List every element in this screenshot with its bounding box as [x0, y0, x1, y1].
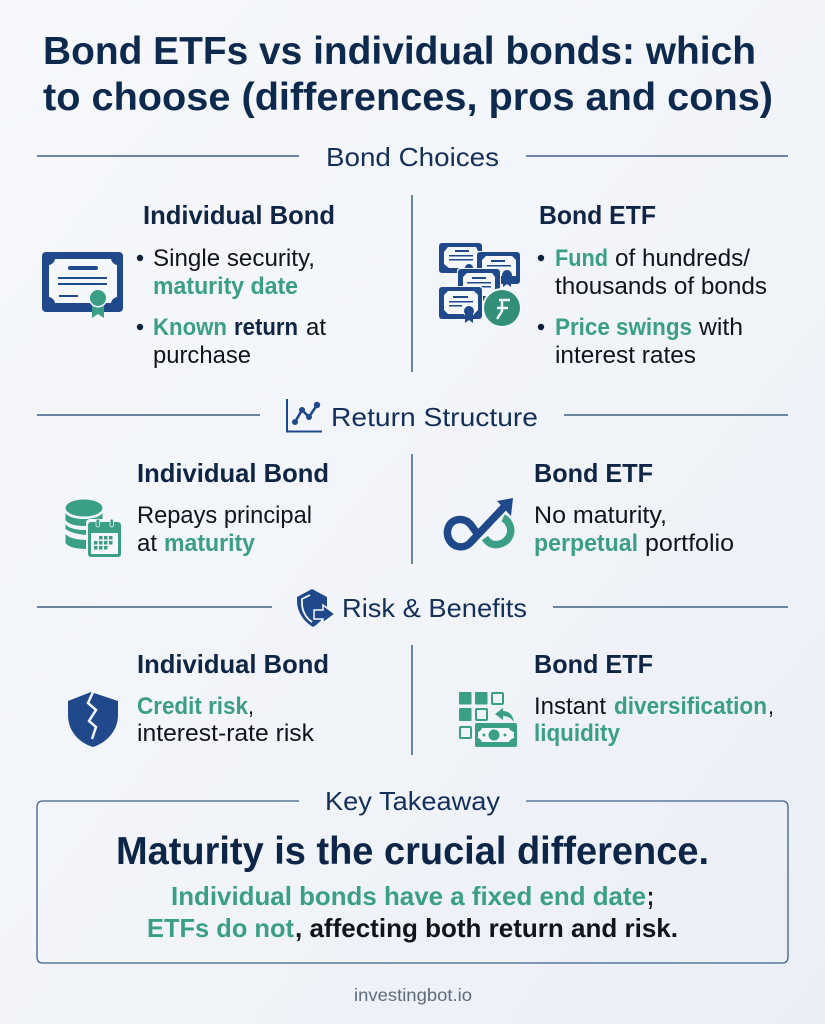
text: repays principal: at [137, 530, 157, 557]
bullet list: maturity date [153, 273, 298, 300]
bullet list: interest rates [555, 342, 696, 369]
heading: Individual Bond: Individual Bond [137, 649, 329, 679]
text: repays principal [137, 502, 312, 557]
divider [411, 454, 413, 564]
text: explanation [147, 881, 678, 943]
bullet list: Fund [555, 245, 608, 272]
bullet list: return [234, 314, 298, 341]
bullet list [137, 245, 326, 369]
bullet list: thousands of bonds [555, 273, 767, 300]
text: no maturity: No maturity, [534, 502, 667, 529]
icon: infinity arrow [447, 498, 513, 547]
text: explanation: ; [647, 881, 654, 911]
section heading: Bond Choices: Bond Choices [326, 142, 499, 172]
panel: Bond ETF return [447, 458, 734, 557]
text: repays principal: maturity [164, 530, 256, 557]
text: no maturity: portfolio [645, 530, 734, 557]
text: instant diversification: liquidity [534, 720, 621, 747]
icon: coin stack with calendar [66, 500, 122, 558]
footer: source: investingbot.io [354, 985, 472, 1005]
text: instant diversification: Instant [534, 693, 606, 720]
panel: Bond ETF benefits [459, 649, 774, 747]
bullet list [538, 245, 767, 369]
text: explanation: , affecting both return and risk. [295, 913, 678, 943]
panel: Individual Bond choices [42, 200, 335, 369]
bullet list: with [698, 314, 743, 341]
heading: Key Takeaway: Key Takeaway [325, 786, 500, 816]
title: to choose (differences, pros and cons) [43, 76, 773, 119]
bullet list: of hundreds/ [615, 245, 750, 272]
text: instant diversification [534, 693, 774, 747]
text: credit risk: , [248, 693, 254, 720]
panel: Individual Bond return [66, 458, 329, 558]
title [43, 30, 773, 119]
heading: Individual Bond: Individual Bond [143, 200, 335, 230]
panel: Bond ETF choices [438, 200, 767, 369]
panel: Individual Bond risk [68, 649, 329, 747]
title: Bond ETFs vs individual bonds: which [43, 30, 756, 73]
icon: line chart [287, 399, 322, 432]
text: explanation: Individual bonds have a fixed end date [171, 881, 646, 911]
divider [411, 195, 413, 372]
bullet list: Price swings [555, 314, 692, 341]
text: explanation: ETFs do not [147, 913, 294, 943]
icon: cracked shield [68, 692, 118, 747]
text: credit risk: interest-rate risk [137, 720, 315, 747]
text: no maturity [534, 502, 734, 557]
heading: Bond ETF: Bond ETF [534, 649, 653, 679]
bullet list: at [306, 314, 326, 341]
section heading: Return Structure: Return Structure [331, 402, 538, 432]
text: credit risk [137, 693, 315, 747]
section heading: Risk & Benefits: Risk & Benefits [342, 593, 527, 623]
icon: stack of certificates with fund coin [438, 243, 522, 328]
heading: Bond ETF: Bond ETF [534, 458, 653, 488]
panel: key takeaway [37, 786, 788, 963]
heading: Bond ETF: Bond ETF [539, 200, 656, 230]
icon: diversification grid and cash [459, 692, 517, 747]
bullet list: purchase [153, 342, 251, 369]
text: no maturity: perpetual [534, 530, 638, 557]
section heading: Return Structure [37, 399, 788, 432]
text: instant diversification: diversification [614, 693, 767, 720]
divider [411, 645, 413, 755]
icon: shield with arrow [297, 589, 335, 627]
icon: bond certificate [42, 252, 123, 318]
text: repays principal: Repays principal [137, 502, 312, 529]
heading: Individual Bond: Individual Bond [137, 458, 329, 488]
text: instant diversification: , [768, 693, 774, 720]
section heading: Risk & Benefits [37, 589, 788, 627]
bullet list: Known [153, 314, 227, 341]
bullet list: Single security, [153, 245, 315, 272]
callout: main statement: Maturity is the crucial difference. [116, 830, 709, 873]
text: credit risk: Credit risk [137, 693, 249, 720]
